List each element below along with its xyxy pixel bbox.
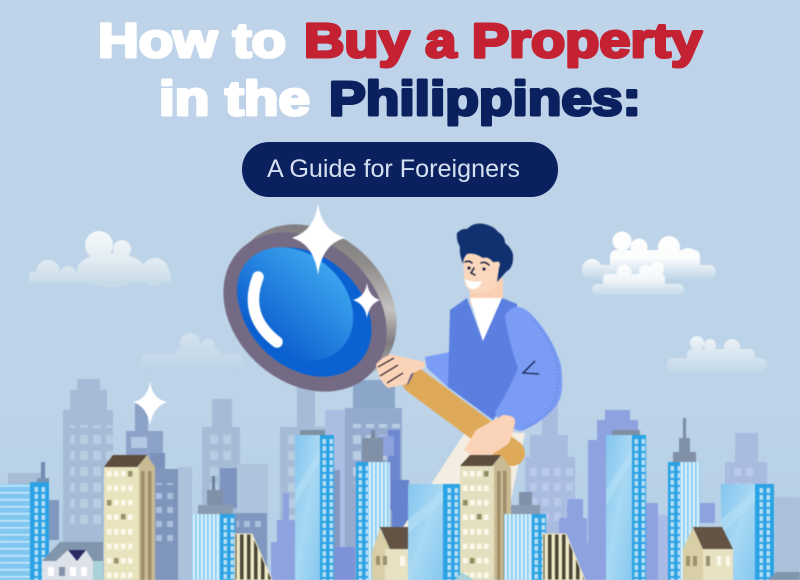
blue tower 5 — [504, 492, 546, 580]
striped building 2 — [543, 534, 585, 580]
person: smile — [465, 279, 482, 289]
silver back rim — [201, 192, 429, 416]
blue tower 2 — [192, 476, 235, 580]
star: large on magnifier — [292, 203, 345, 275]
person: white shirt — [470, 298, 502, 342]
title line 2: in the — [159, 73, 310, 126]
house: left — [42, 542, 103, 580]
skyline: mid-tone buildings — [49, 403, 409, 580]
purple rim — [191, 200, 419, 424]
illustration scene — [0, 192, 800, 580]
title line 1 — [98, 15, 702, 68]
house roof peek: bottom right — [768, 572, 800, 580]
sleeve fold — [523, 361, 539, 374]
cloud: upper right back — [582, 232, 716, 279]
blue tower 6 — [606, 430, 646, 580]
handle collar — [402, 369, 414, 385]
cloud: lower right — [667, 336, 767, 372]
person: lower hand — [464, 415, 515, 456]
skyline: pale background buildings — [8, 379, 800, 580]
person: right sleeve — [495, 307, 562, 431]
finger lines — [378, 358, 403, 383]
title line 1: Buy a Property — [304, 15, 702, 68]
lens highlight — [253, 277, 277, 342]
sleeve shading dots — [523, 320, 558, 429]
person: head — [463, 251, 503, 293]
house: centre — [372, 527, 422, 580]
skyline: lavender buildings — [271, 410, 715, 580]
magnifying glass handle — [415, 381, 512, 453]
magnifying glass head — [191, 192, 429, 424]
subtitle pill — [242, 142, 558, 197]
lens light — [214, 224, 376, 384]
title line 2: Philippines: — [329, 73, 641, 126]
person: hair — [457, 224, 513, 282]
glass tower right — [721, 484, 774, 580]
blue tower 3 — [295, 430, 334, 580]
person: blue vest — [448, 298, 520, 420]
blue tower 4 — [356, 430, 390, 580]
cloud: upper left — [29, 231, 171, 287]
star: small on magnifier — [353, 283, 380, 318]
cloud: faint centre — [141, 333, 243, 368]
striped building 1 — [235, 534, 272, 580]
subtitle pill: A Guide for Foreigners — [267, 155, 520, 183]
person: upper hand and wrist — [376, 355, 425, 388]
person: face details — [465, 261, 489, 275]
star: on skyline — [133, 381, 167, 425]
house: right — [683, 527, 733, 580]
blue tower 7 — [668, 418, 700, 580]
person: trousers — [403, 431, 525, 580]
person: left sleeve — [425, 352, 450, 388]
house roof peek: bottom centre — [455, 572, 474, 580]
title line 1: How to — [98, 15, 286, 68]
glass tower centre — [408, 484, 462, 580]
lens dark — [213, 221, 397, 403]
title line 2 — [159, 73, 641, 126]
blue tower 1 — [0, 462, 49, 580]
tan building 1 — [104, 455, 155, 580]
cloud: upper right front — [592, 262, 684, 295]
person: neck — [470, 278, 503, 305]
tan building 2 — [460, 455, 511, 580]
person holding magnifying glass — [191, 192, 562, 580]
